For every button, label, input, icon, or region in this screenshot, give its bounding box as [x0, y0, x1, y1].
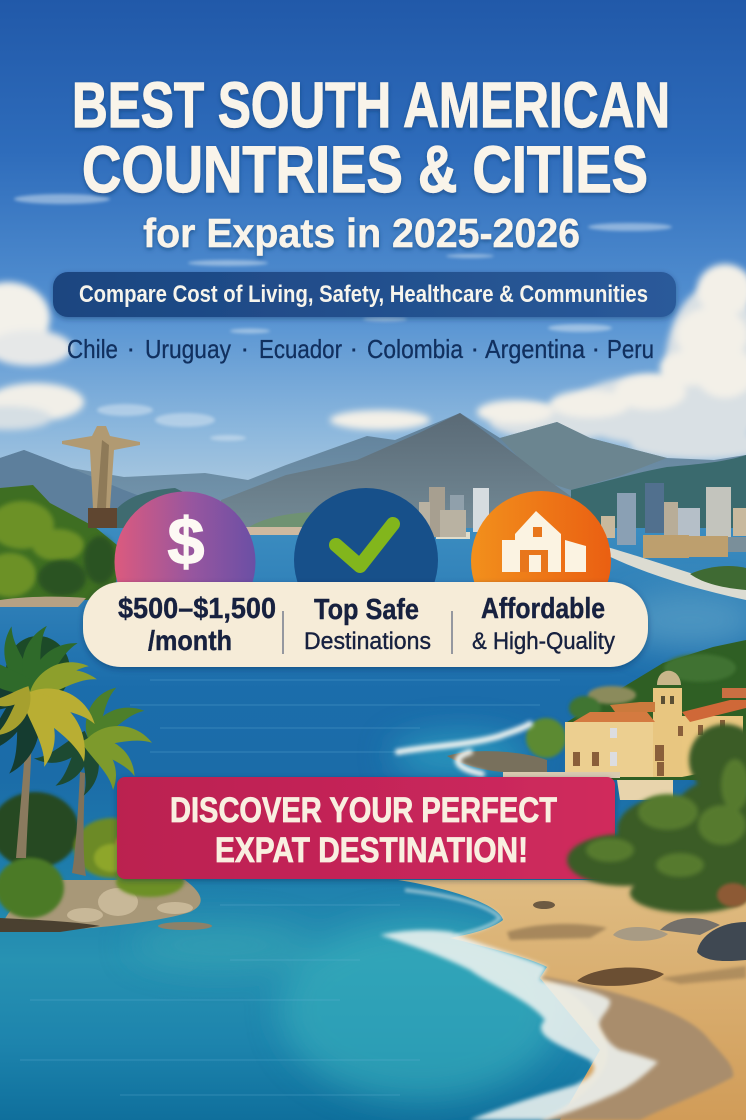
city skyline	[419, 483, 746, 590]
country list: Chile	[67, 334, 118, 364]
water ripples	[20, 680, 560, 1095]
country list: Peru	[607, 334, 654, 364]
icon: dollar circle	[114, 492, 256, 632]
mountains	[0, 413, 746, 545]
icon: green check circle	[294, 488, 438, 632]
high cirrus clouds	[14, 194, 672, 441]
clouds left	[0, 282, 84, 430]
water	[0, 528, 746, 1120]
call to action banner: DISCOVER YOUR PERFECT	[170, 791, 557, 830]
country list: ·	[593, 340, 600, 362]
icon: house circle	[471, 491, 611, 631]
stat: monthly cost	[118, 593, 276, 656]
subtitle pill: Compare Cost of Living, Safety, Healthcare & Communities	[79, 281, 648, 308]
call to action banner	[117, 777, 615, 879]
Christ statue	[62, 426, 140, 528]
palm trees	[0, 623, 152, 876]
stat: safe destinations: Destinations	[304, 628, 431, 655]
country list: Argentina	[485, 334, 585, 364]
palm trunks	[16, 730, 86, 876]
call to action banner: EXPAT DESTINATION!	[215, 831, 528, 870]
subtitle pill	[53, 272, 676, 317]
country list: ·	[351, 340, 358, 362]
country list: Ecuador	[259, 334, 342, 364]
title	[72, 69, 670, 256]
icon: dollar circle: $	[168, 504, 204, 578]
country list: ·	[242, 340, 249, 362]
country list: ·	[472, 340, 479, 362]
clouds right	[330, 264, 746, 459]
stat: monthly cost: /month	[148, 625, 232, 656]
country list: Colombia	[367, 334, 463, 364]
sky	[0, 0, 746, 540]
stat: affordable quality: & High-Quality	[472, 628, 615, 655]
stat: affordable quality: Affordable	[481, 593, 605, 625]
country list: Uruguay	[145, 334, 231, 364]
teal shallows	[130, 592, 746, 1100]
front palm crown	[0, 623, 102, 777]
country list	[67, 334, 654, 364]
back palm crown	[32, 681, 152, 796]
stat: monthly cost: $500–$1,500	[118, 593, 276, 625]
country list: ·	[128, 340, 135, 362]
stat: safe destinations	[304, 594, 431, 655]
left forest headland	[0, 485, 117, 607]
distant shore and town	[245, 512, 746, 600]
right hills and villa	[398, 640, 746, 780]
left foreground island	[0, 792, 212, 932]
title: for Expats in 2025-2026	[143, 210, 580, 256]
stat: affordable quality	[472, 593, 615, 655]
beach rocks	[507, 901, 746, 986]
right foreground trees	[567, 724, 746, 913]
stats panel	[83, 582, 648, 667]
sandy beach	[380, 880, 746, 1120]
stat: safe destinations: Top Safe	[314, 594, 419, 626]
